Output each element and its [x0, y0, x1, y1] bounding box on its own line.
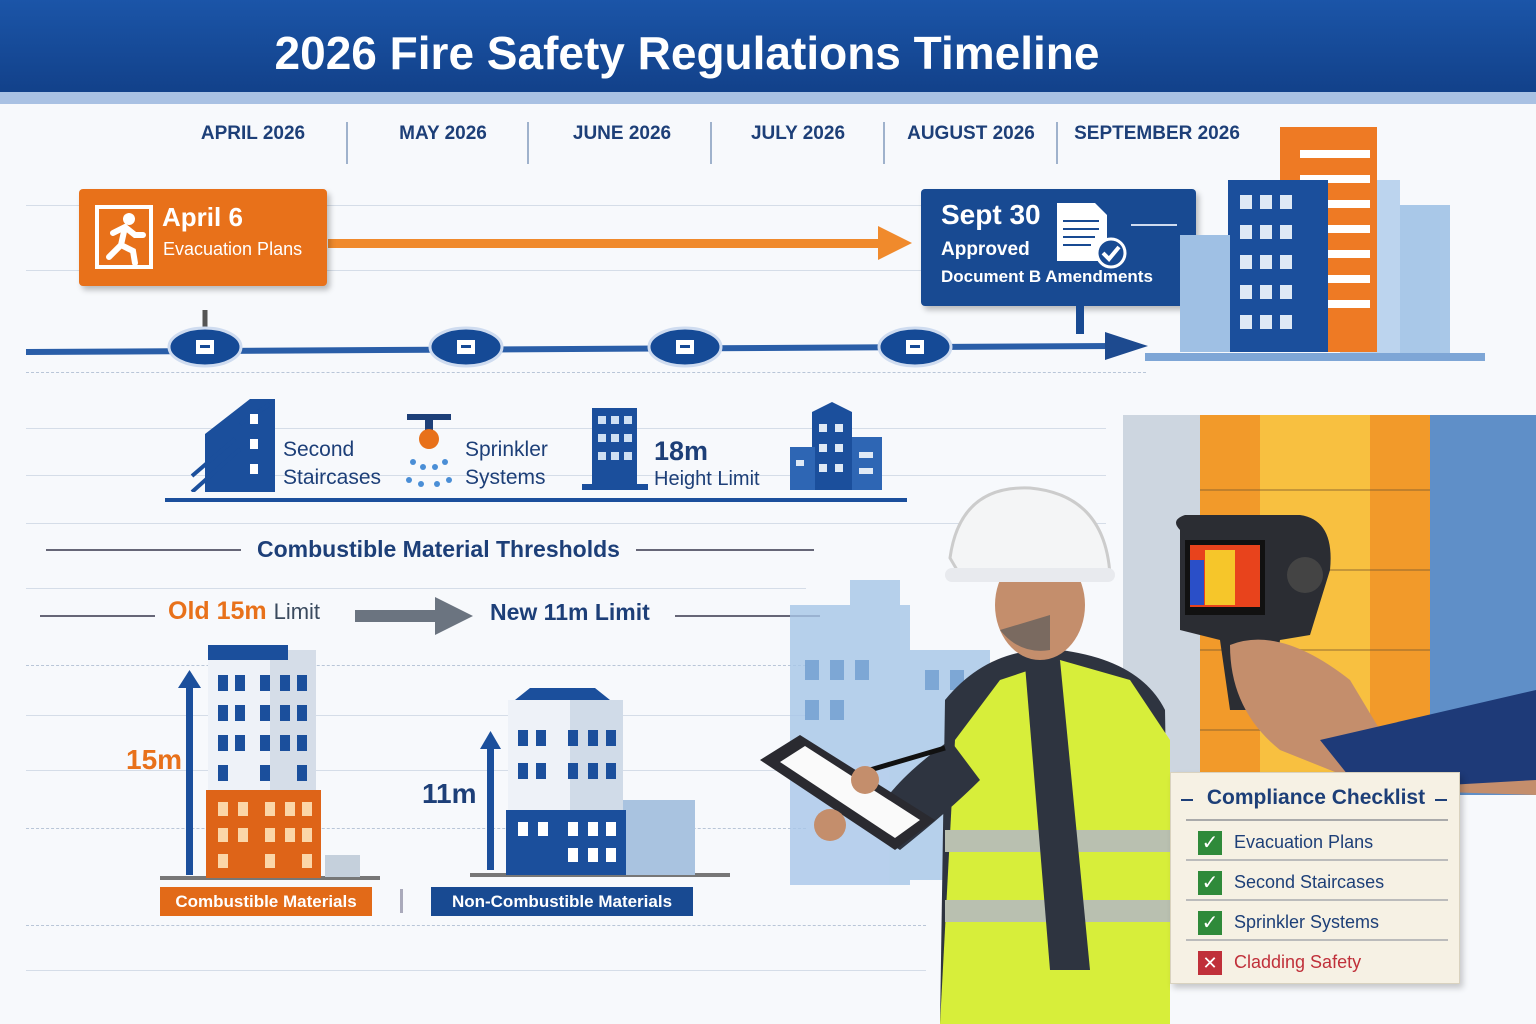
icon row: Second	[283, 438, 354, 461]
callout: Sept 30: Approved	[941, 239, 1030, 260]
timeline line with nodes	[26, 310, 1148, 368]
text: AUGUST 2026	[907, 123, 1035, 144]
icon: city buildings	[790, 402, 882, 490]
icon row: Height Limit	[654, 468, 760, 490]
label: non-combustible materials: Non-Combustible Materials	[452, 892, 672, 911]
body vest	[940, 650, 1170, 1024]
callout: April 6: April 6	[162, 202, 243, 232]
illustration: inspector with thermal camera	[760, 415, 1536, 1024]
old vs new limit: New 11m Limit	[490, 599, 650, 625]
heading: combustible thresholds: Combustible Material Thresholds	[257, 536, 620, 562]
skyline top right	[1145, 127, 1485, 361]
item: second staircases	[1186, 867, 1448, 901]
compliance checklist	[1170, 772, 1460, 984]
label: combustible materials	[160, 887, 372, 916]
icon row	[165, 392, 907, 502]
text: SEPTEMBER 2026	[1074, 123, 1240, 144]
orange arrow	[328, 226, 912, 260]
item: evacuation plans: Evacuation Plans	[1234, 832, 1373, 852]
text: JUNE 2026	[573, 123, 671, 144]
callout: April 6: Evacuation Plans	[163, 239, 302, 259]
old vs new limit: Old 15m Limit	[168, 597, 320, 625]
item: second staircases: ✓	[1202, 872, 1218, 894]
label: non-combustible materials	[431, 887, 693, 916]
arm & clipboard	[870, 740, 980, 850]
item: second staircases: Second Staircases	[1234, 872, 1384, 892]
head	[995, 550, 1085, 660]
icon: sprinkler	[406, 414, 452, 487]
item: cladding safety	[1198, 951, 1362, 975]
old vs new limit	[40, 597, 820, 635]
item: sprinkler systems: ✓	[1202, 912, 1218, 934]
item: sprinkler systems	[1186, 907, 1448, 941]
title: 2026 Fire Safety Regulations Timeline	[275, 27, 1099, 79]
callout: Sept 30	[921, 189, 1196, 306]
icon row: 18m	[654, 436, 708, 466]
item: evacuation plans: ✓	[1202, 832, 1218, 854]
text: 15m	[126, 744, 182, 775]
item: cladding safety: ✕	[1202, 953, 1218, 973]
item: sprinkler systems: Sprinkler Systems	[1234, 912, 1379, 932]
text: APRIL 2026	[201, 123, 305, 144]
compliance checklist: Compliance Checklist	[1207, 786, 1425, 809]
icon row: Staircases	[283, 466, 381, 489]
icon row: Systems	[465, 466, 546, 489]
text: 11m	[422, 778, 476, 809]
camera	[1176, 515, 1331, 710]
icon row: Sprinkler	[465, 438, 548, 461]
item: evacuation plans	[1186, 827, 1448, 861]
header banner	[0, 0, 1536, 104]
callout: April 6	[79, 189, 327, 286]
building: 15m combustible	[160, 645, 380, 880]
label: combustible materials: Combustible Materials	[175, 892, 357, 911]
callout: Sept 30: Document B Amendments	[941, 267, 1153, 286]
icon: staircase building	[190, 399, 275, 492]
text: JULY 2026	[751, 123, 845, 144]
text: MAY 2026	[399, 123, 487, 144]
building: 11m non-combustible	[470, 688, 730, 877]
icon: document check	[1057, 203, 1126, 268]
icon: running exit	[95, 205, 153, 269]
icon: tall building	[582, 408, 648, 490]
item: cladding safety: Cladding Safety	[1234, 952, 1361, 972]
callout: Sept 30: Sept 30	[941, 199, 1041, 230]
